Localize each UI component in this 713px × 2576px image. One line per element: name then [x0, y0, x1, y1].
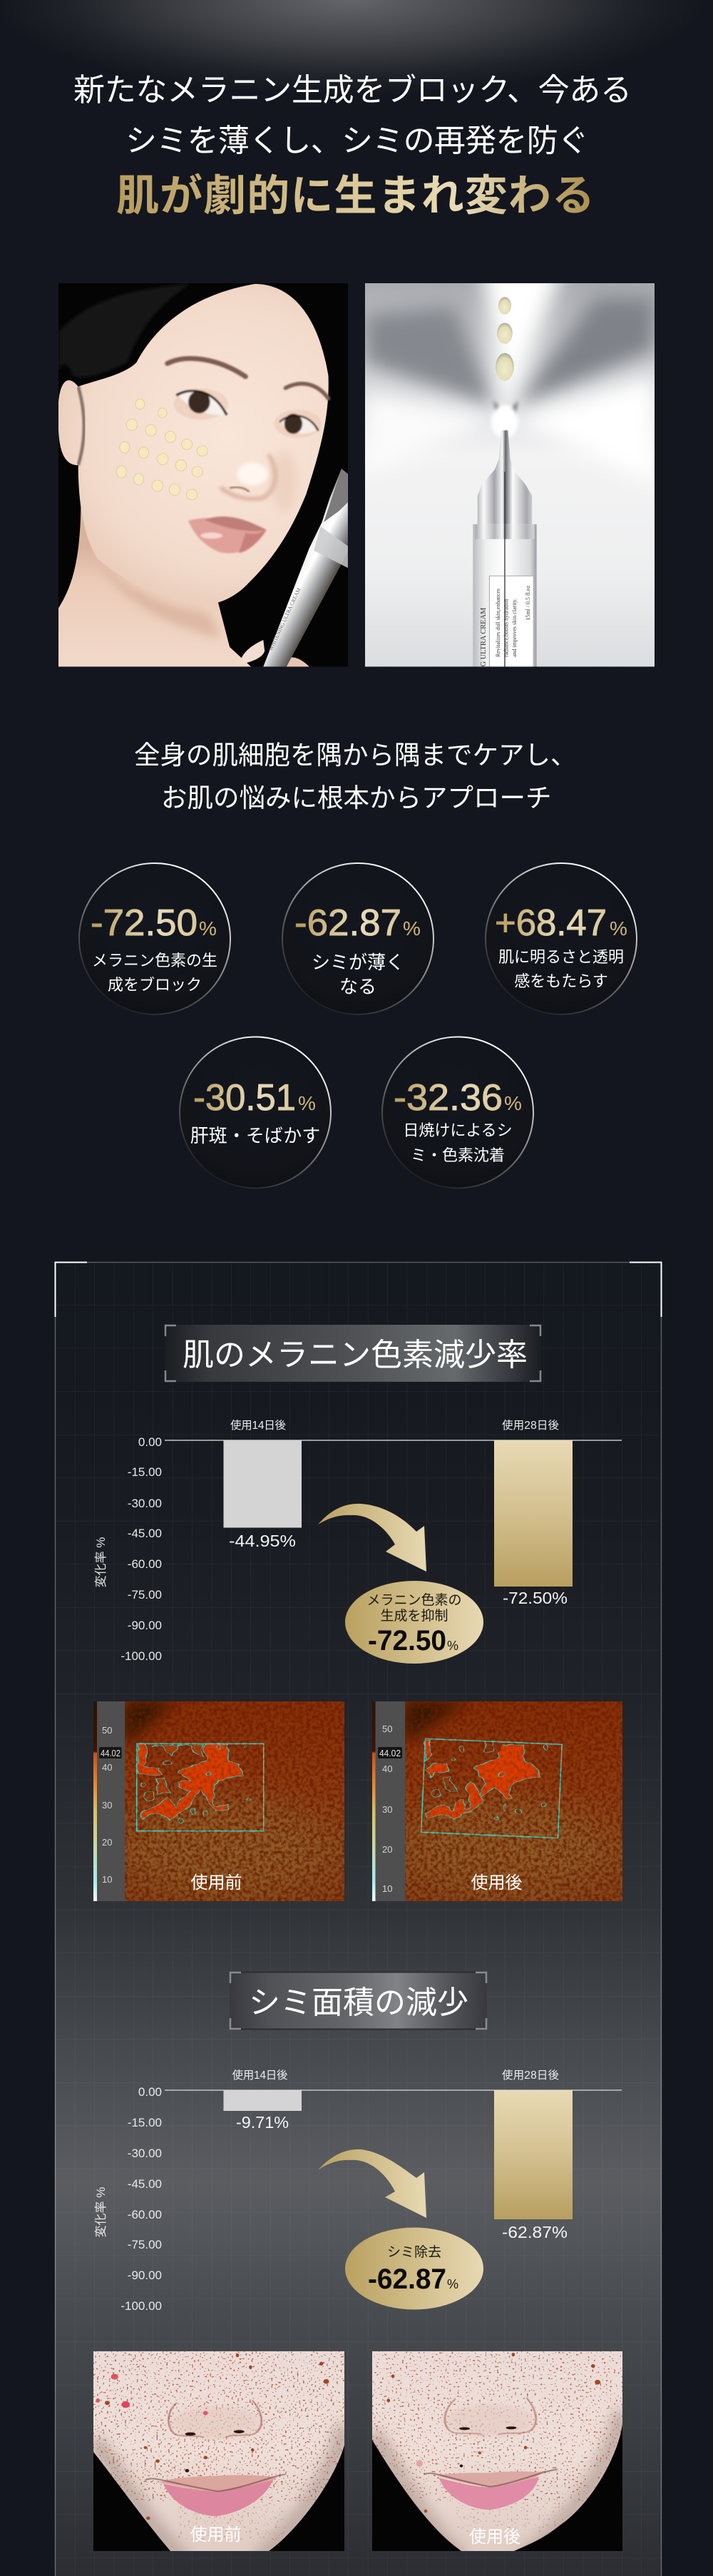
photo: model with cream dots	[58, 283, 348, 667]
bar: after 28 days	[494, 1419, 573, 1607]
stat circle: melanin block	[79, 863, 230, 1014]
y axis ticks: -30.00	[128, 1497, 162, 1510]
colour scale labels after: 50	[382, 1724, 392, 1734]
y axis ticks: -45.00	[128, 1527, 162, 1540]
headline white lines	[73, 73, 632, 158]
y axis ticks: -75.00	[128, 1588, 162, 1602]
stat circle: sun spots: -32.36	[394, 1077, 503, 1119]
neck and shoulder	[58, 505, 251, 666]
colour scale labels: 10	[102, 1874, 112, 1885]
y axis ticks 2: 0.00	[138, 2085, 162, 2099]
y axis ticks: -90.00	[128, 1619, 162, 1632]
nose shading after	[445, 2404, 535, 2438]
bottle label: and improves skin clarity.	[511, 599, 518, 657]
nose shading	[170, 2406, 261, 2440]
bar: after 14 days: 使用14日後	[230, 1419, 286, 1432]
y axis ticks	[120, 1435, 162, 1663]
lips after	[424, 2470, 558, 2510]
colour scale labels after: 10	[382, 1883, 392, 1894]
bottle label	[480, 472, 533, 667]
colour scale labels after: 20	[382, 1844, 392, 1855]
bottle collar	[476, 524, 534, 539]
stat circle: sun spots	[382, 1037, 533, 1188]
y axis ticks 2: -75.00	[128, 2238, 162, 2251]
stat circle: melasma and freckles: -30.51	[193, 1077, 296, 1119]
stat circle: spots fade: シミが薄く	[312, 952, 404, 973]
eyebrow right	[286, 384, 328, 399]
bar 2: after 28 days: 使用28日後	[502, 2069, 559, 2082]
face photo: after: 使用後	[469, 2527, 520, 2547]
callout badge: -72.50	[368, 1625, 446, 1656]
axis line	[165, 1440, 622, 1441]
colour scale labels after: 30	[382, 1804, 392, 1815]
bar 2: after 14 days	[224, 2069, 302, 2132]
callout badge: %	[447, 1639, 458, 1653]
panel: clinical results	[55, 1262, 662, 2576]
center sparkle	[491, 399, 518, 438]
small outlines	[141, 1745, 251, 1824]
heatmap: after	[372, 1701, 622, 1901]
droplets	[496, 297, 514, 381]
y axis ticks 2	[120, 2085, 162, 2313]
y axis label 2: 変化率 %	[94, 2187, 108, 2237]
heat texture over blobs after	[405, 1701, 622, 1901]
stat circle: melanin block: メラニン色素の生	[92, 952, 217, 969]
heatmap: before	[93, 1701, 344, 1901]
colour scale labels: 50	[102, 1725, 112, 1736]
dark light-ray wedges	[365, 297, 655, 407]
stat circle: melanin block: 成をブロック	[108, 976, 202, 994]
stat circle: spots fade	[282, 863, 434, 1014]
y axis ticks: 0.00	[138, 1435, 162, 1449]
soft shading beside nose	[274, 452, 297, 509]
y axis ticks: -100.00	[120, 1649, 162, 1663]
pigment blobs	[138, 1744, 245, 1821]
stat circle: sun spots: ミ・色素沈着	[411, 1146, 505, 1164]
y axis ticks 2: -100.00	[120, 2299, 162, 2313]
headline gold line: 肌が劇的に生まれ変わる	[116, 172, 595, 220]
heatmap: before: 使用前	[191, 1873, 242, 1893]
y axis ticks 2: -60.00	[128, 2208, 162, 2221]
top spotlight glow	[0, 0, 713, 96]
bottle tip and shoulders	[478, 430, 532, 524]
measurement box	[137, 1743, 264, 1831]
stat circle: spots fade: %	[403, 917, 421, 940]
colour scale labels: 20	[102, 1837, 112, 1848]
stat circle: melasma and freckles: 肝斑・そばかす	[190, 1125, 320, 1146]
hair sheen	[58, 284, 191, 377]
eye right	[275, 409, 322, 438]
stat circle: spots fade: -62.87	[294, 902, 401, 944]
nostrils	[185, 2430, 245, 2435]
axis line 2	[165, 2089, 622, 2091]
section title: melanin reduction: 肌のメラニン色素減少率	[183, 1338, 528, 1373]
fingernail	[241, 640, 265, 664]
colour scale labels after: 40	[382, 1763, 392, 1774]
bottle label: G ULTRA CREAM	[480, 607, 488, 667]
stat circle: melasma and freckles: %	[298, 1092, 316, 1114]
light background	[365, 283, 655, 667]
nostrils after	[459, 2426, 516, 2430]
stat circle: sun spots: %	[504, 1092, 522, 1114]
nose	[220, 454, 275, 499]
large spots	[96, 2353, 329, 2520]
callout badge 2: -62.87	[368, 2264, 446, 2295]
face photo: before: 使用前	[190, 2525, 241, 2545]
headline	[73, 73, 632, 220]
bar 2: after 28 days: -62.87%	[502, 2223, 568, 2241]
bottle body	[473, 524, 537, 667]
section title: spot area	[230, 1972, 487, 2030]
y axis ticks 2: -45.00	[128, 2177, 162, 2191]
bar chart: spot area	[94, 2069, 622, 2313]
bar 2: after 14 days: -9.71%	[236, 2113, 289, 2132]
section title: melanin reduction	[165, 1325, 541, 1382]
intro text: お肌の悩みに根本からアプローチ	[161, 783, 552, 813]
stat circle: melasma and freckles	[180, 1037, 331, 1188]
bar: after 14 days	[224, 1419, 302, 1550]
nose after	[445, 2398, 536, 2435]
face photo: before	[93, 2351, 344, 2561]
bottle label: radiance,boosts hydration	[503, 599, 509, 657]
hair strand by the ear	[78, 387, 84, 465]
product pen in hand: WHITENING ULTRA CREAM	[267, 586, 302, 651]
stat circle: melanin block: %	[199, 917, 217, 940]
colour scale labels: 40	[102, 1762, 112, 1773]
stat circle: melanin block: -72.50	[91, 902, 198, 944]
colour scale labels: 30	[102, 1800, 112, 1811]
photo: product with droplets	[365, 267, 655, 667]
section title: spot area: シミ面積の減少	[249, 1985, 468, 2020]
y axis label: 変化率 %	[94, 1537, 108, 1587]
bar chart: melanin	[94, 1419, 622, 1664]
y axis ticks 2: -15.00	[128, 2116, 162, 2129]
large spots after	[386, 2353, 600, 2513]
nose	[168, 2401, 262, 2438]
callout badge 2	[345, 2227, 483, 2310]
hand behind pen	[287, 657, 309, 666]
callout badge	[345, 1581, 483, 1664]
bar: after 14 days: -44.95%	[229, 1532, 296, 1550]
callout badge: メラニン色素の	[366, 1592, 462, 1608]
bar 2: after 28 days	[494, 2069, 573, 2241]
stat circle: brightness: 感をもたらす	[514, 972, 608, 990]
colour scale labels after: 44.02	[379, 1748, 401, 1758]
heatmap: after: 使用後	[471, 1873, 522, 1893]
small outlines after	[431, 1742, 548, 1819]
bright light-ray beams	[365, 283, 655, 472]
stat circle: brightness: +68.47	[495, 902, 607, 944]
y axis ticks: -15.00	[128, 1465, 162, 1479]
cream dots	[116, 399, 207, 500]
callout badge 2: シミ除去	[387, 2244, 441, 2260]
stat circle: brightness	[486, 863, 637, 1014]
heat texture over blobs	[125, 1701, 344, 1901]
colour scale labels: 44.02	[101, 1748, 120, 1758]
stat circle: spots fade: なる	[339, 976, 376, 997]
product pen in hand	[263, 469, 348, 667]
face skin	[58, 284, 329, 605]
stat circle: brightness: %	[610, 917, 627, 940]
y axis ticks 2: -30.00	[128, 2147, 162, 2160]
jaw shadow on neck	[108, 574, 221, 638]
colour scale labels after	[378, 1724, 402, 1894]
colour scale labels	[99, 1725, 121, 1885]
bar: after 28 days: 使用28日後	[502, 1419, 559, 1432]
bar 2: after 14 days: 使用14日後	[232, 2069, 288, 2082]
eye left	[174, 388, 228, 420]
y axis ticks: -60.00	[128, 1557, 162, 1571]
eyebrow left	[168, 359, 245, 377]
bar: after 28 days: -72.50%	[503, 1589, 568, 1607]
bottle label: 15ml / 0.5 fl.oz	[525, 585, 531, 621]
headline white lines: シミを薄くし、シミの再発を防ぐ	[125, 123, 589, 158]
measurement box after	[421, 1738, 562, 1838]
callout badge: 生成を抑制	[380, 1608, 448, 1624]
stat circle: sun spots: 日焼けによるシ	[403, 1121, 513, 1139]
arrow	[318, 1504, 426, 1572]
callout badge 2: %	[447, 2277, 458, 2291]
intro text	[134, 740, 576, 813]
face photo: after	[372, 2351, 622, 2561]
headline white lines: 新たなメラニン生成をブロック、今ある	[73, 73, 632, 108]
stat circle: brightness: 肌に明るさと透明	[498, 948, 624, 966]
intro text: 全身の肌細胞を隅から隅までケアし、	[134, 740, 576, 770]
y axis ticks 2: -90.00	[128, 2269, 162, 2282]
arrow 2	[318, 2149, 426, 2218]
lips	[188, 516, 267, 554]
bottle label: Revitalizes dull skin,enhances	[495, 589, 501, 657]
lips	[145, 2474, 286, 2516]
pigment blobs after	[424, 1739, 540, 1820]
